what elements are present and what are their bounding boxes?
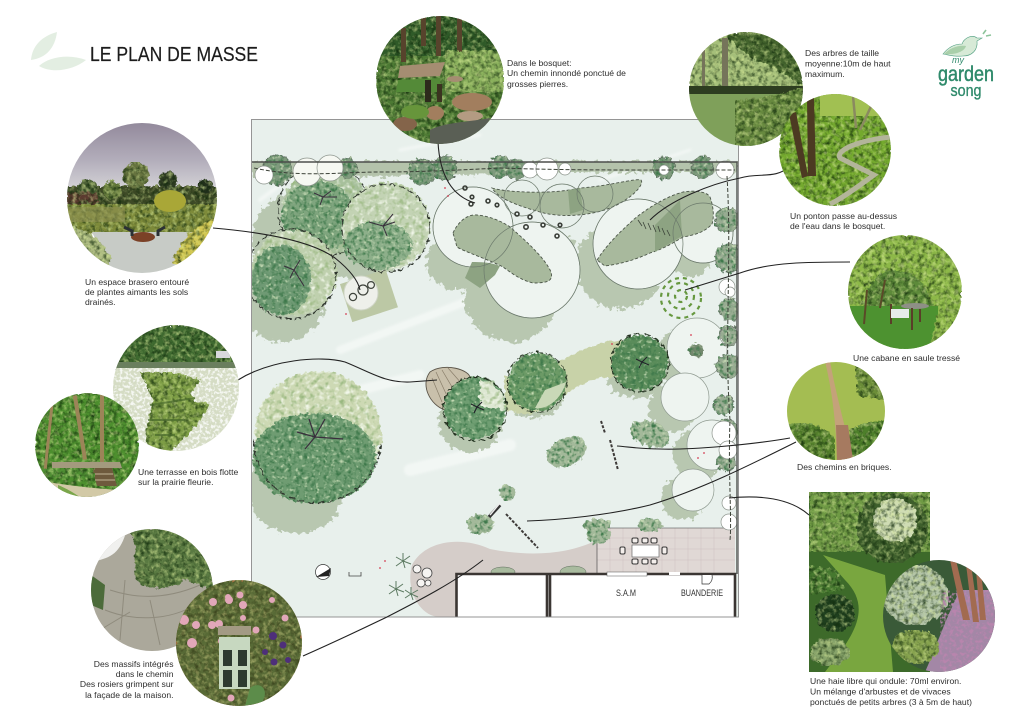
logo wordmark: my <box>952 55 964 65</box>
icon: bird <box>943 30 991 56</box>
leader: roses <box>303 560 483 656</box>
tree 7 <box>611 334 669 392</box>
ponton hatching <box>638 220 670 236</box>
caption: bosquet: Dans le bosquet: <box>507 58 572 68</box>
gravel <box>92 232 195 275</box>
ground highlights <box>260 181 515 475</box>
caption: bosquet: Un chemin innondé ponctué de <box>507 68 626 78</box>
caption: bosquet: grosses pierres. <box>507 79 568 89</box>
logo: song <box>950 81 982 100</box>
photo: climbing roses <box>176 580 302 706</box>
logo <box>938 30 994 100</box>
boundary shrubs right <box>712 207 738 530</box>
tree 3 <box>246 229 337 319</box>
photo: hedge <box>809 492 930 672</box>
room label: buanderie: BUANDERIE <box>681 588 723 599</box>
leader: brick path upper <box>617 438 790 449</box>
caption: massifs and roses: la façade de la maison. <box>85 690 174 700</box>
caption: medium trees: Des arbres de taille <box>805 48 879 58</box>
caption: brasero: de plantes aimants les sols <box>85 287 188 297</box>
planting circles <box>433 187 737 511</box>
caption: massifs and roses <box>80 659 174 700</box>
photo: paved path <box>91 529 213 651</box>
tree 4 <box>252 371 381 503</box>
shrub overlaps <box>465 188 682 288</box>
clematis <box>262 632 291 666</box>
leader: brasero <box>213 228 360 290</box>
terrace and gravel paving <box>410 528 735 617</box>
trees <box>246 164 701 503</box>
caption: massifs and roses: Des massifs intégrés <box>94 659 174 669</box>
caption: medium trees <box>805 48 891 79</box>
tree 1 <box>276 175 365 256</box>
leader: brick path lower <box>527 442 796 521</box>
photo: brick paths <box>787 361 885 460</box>
brick path markers <box>506 421 618 548</box>
shrub masses <box>453 180 713 283</box>
rear hedge band <box>253 162 735 178</box>
boundary wall line <box>252 162 737 574</box>
planting bed <box>67 204 217 234</box>
caption: bosquet <box>507 58 626 89</box>
leader: bosquet <box>438 142 475 203</box>
caption: medium trees: moyenne:10m de haut <box>805 58 891 68</box>
gravel path and deck <box>426 340 626 415</box>
shrub overlay circles <box>433 176 733 318</box>
photo: flowering meadow <box>113 325 240 452</box>
patio planting <box>389 553 586 600</box>
caption: boardwalk <box>790 211 897 231</box>
leader: terrasse <box>238 359 437 382</box>
photo: wooden deck <box>35 393 139 497</box>
caption: terrace: Une terrasse en bois flotte <box>138 467 239 477</box>
photo: bosquet <box>376 16 504 144</box>
caption: brick paths: Des chemins en briques. <box>797 462 892 472</box>
rose blossoms <box>179 592 288 702</box>
brasero <box>340 269 398 322</box>
trees on horizon <box>67 162 217 206</box>
dining table with chairs <box>620 538 667 564</box>
caption: hedge: ponctués de petits arbres (3 à 5m de haut) <box>810 697 972 707</box>
photo: brasero <box>67 123 217 275</box>
photo: willow cabin <box>848 235 962 350</box>
stepping stones <box>463 186 562 238</box>
caption: massifs and roses: Des rosiers grimpent sur <box>80 679 174 689</box>
window <box>219 637 250 689</box>
leader: ponton <box>650 166 790 220</box>
plan ground <box>252 120 738 617</box>
tree 6 <box>507 352 567 412</box>
panel: garden plan <box>238 120 743 617</box>
leader lines <box>213 142 850 656</box>
caption: medium trees: maximum. <box>805 69 845 79</box>
caption: terrace <box>138 467 239 487</box>
tree and shrub shadows <box>238 162 738 534</box>
icon: title leaves <box>31 32 86 70</box>
leader: hedge <box>729 497 809 515</box>
tree 2 <box>342 182 430 272</box>
plan border <box>252 120 738 617</box>
room label: S.A.M: S.A.M <box>616 588 636 599</box>
willow cabin <box>661 278 701 318</box>
caption: brasero <box>85 277 189 307</box>
leader: cabane <box>685 262 850 290</box>
boundary shrubs top <box>255 155 734 186</box>
caption: hedge: Un mélange d'arbustes et de vivaces <box>810 686 951 696</box>
caption: hedge: Une haie libre qui ondule: 70ml environ. <box>810 676 961 686</box>
red flower dots <box>345 187 705 569</box>
caption: boardwalk: de l'eau dans le bosquet. <box>790 221 885 231</box>
caption: boardwalk: Un ponton passe au-dessus <box>790 211 897 221</box>
photo: medium trees <box>689 32 803 146</box>
photo: mixed shrubs <box>882 560 995 672</box>
fire pit <box>131 232 155 242</box>
title: LE PLAN DE MASSE <box>90 44 258 66</box>
tree 5 <box>443 377 507 441</box>
logo: garden <box>938 63 994 86</box>
caption: willow cabin: Une cabane en saule tressé <box>853 353 960 363</box>
compass and symbols <box>316 564 361 580</box>
photo: boardwalk <box>779 94 891 206</box>
caption: terrace: sur la prairie fleurie. <box>138 477 213 487</box>
caption: hedge <box>810 676 972 707</box>
house <box>456 572 736 617</box>
caption: brasero: drainés. <box>85 297 116 307</box>
caption: massifs and roses: dans le chemin <box>116 669 174 679</box>
lawn shrubs <box>467 344 703 544</box>
caption: brasero: Un espace brasero entouré <box>85 277 189 287</box>
hedge scribble <box>254 168 735 540</box>
